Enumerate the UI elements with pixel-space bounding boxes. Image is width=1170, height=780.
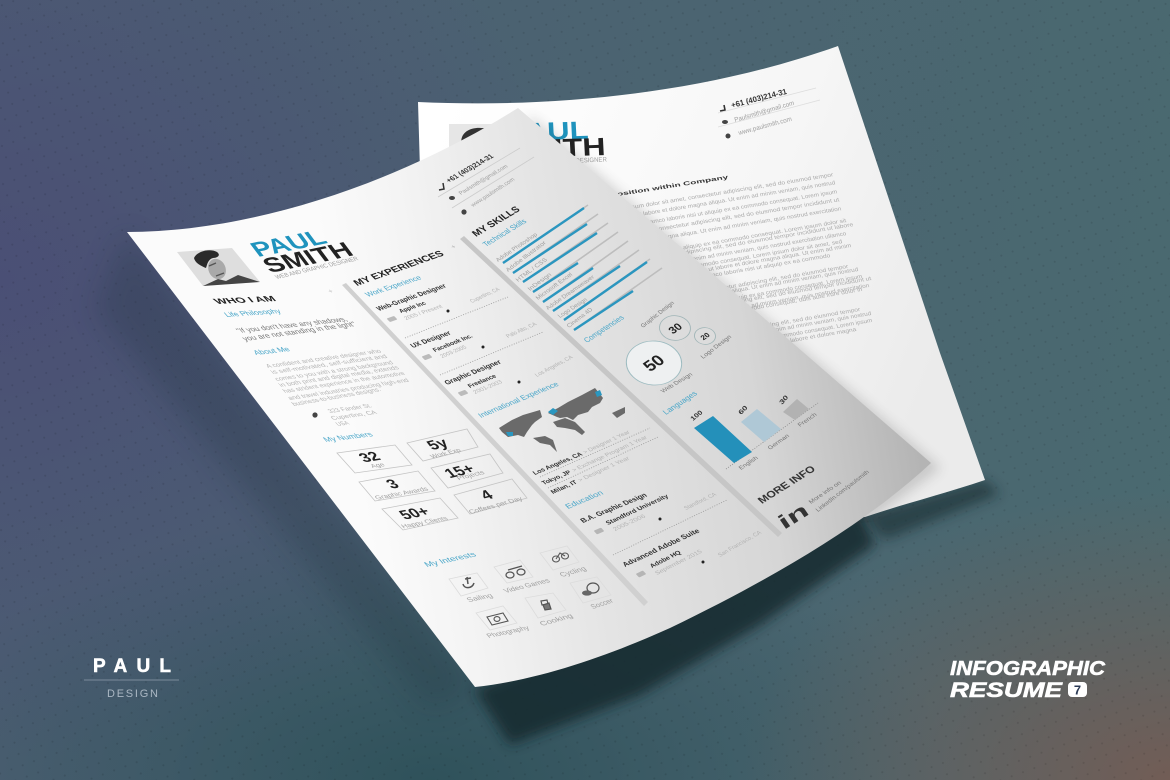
interest labels: Cycling (557, 565, 588, 579)
letterhead name: PAUL (506, 117, 589, 147)
stat values: 4 (477, 488, 497, 503)
column dividers (342, 236, 782, 606)
column 2: international experience (476, 380, 658, 495)
course entry: September 2015 (654, 549, 705, 576)
world map (499, 388, 625, 452)
degree entry (578, 491, 727, 555)
letterhead contact details (718, 87, 820, 138)
icon: location (312, 412, 318, 418)
column 3: competencies bubble chart: Logo Design (700, 335, 733, 360)
letterhead name: WEB AND GRAPHIC DESIGNER (517, 156, 607, 167)
course entry: San Francisco, CA (717, 530, 763, 558)
column 3: competencies bubble chart: Graphic Design (640, 301, 676, 329)
skill labels: HTML / CSS (515, 257, 549, 283)
header: name: WEB AND GRAPHIC DESIGNER (274, 256, 360, 281)
column 2: my experiences (351, 244, 575, 396)
job: graphic designer: Graphic Designer (442, 358, 503, 386)
column 2: international experience: International Experience (476, 380, 561, 419)
job: graphic designer: Freelance (467, 373, 499, 389)
column 1: my numbers: My Numbers (321, 430, 375, 444)
letter body: amet, consectetur adipiscing elit, sed do eiusmod tempor incididunt ut labore (626, 222, 854, 266)
column 2: my experiences: Work Experience (363, 274, 424, 298)
skill labels: Adobe Illustrator (505, 240, 548, 273)
header: name: SMITH (257, 238, 359, 278)
bubble: web design 50: 50 (639, 351, 669, 375)
bubble: graphic design 30 (653, 311, 697, 345)
column 1: my interests: My Interests (422, 550, 478, 569)
marker: plus: + (327, 289, 335, 295)
letter body: labore et dolore magna aliqua. Ut enim ad minim veniam, quis nostrud exercitation (614, 206, 842, 249)
address: Cupertino, CA (330, 410, 379, 422)
letter body: incididunt ut labore et dolore magna aliqua. Ut enim ad minim veniam, quis nostrud (608, 180, 836, 223)
column 3: my skills: Technical Skills (481, 217, 528, 248)
column 3: more info (756, 464, 871, 534)
job: web-graphic designer: Cupertino, CA (469, 287, 501, 304)
column 3: competencies bubble chart: Competencies (582, 313, 626, 344)
icon: linkedin: in (774, 499, 813, 534)
about me paragraph: in both print and digital media, extends (278, 365, 401, 389)
places list: > Designer 1 Year (577, 456, 631, 483)
letter body: ullamco laboris nisi ut aliquip ex ea commodo consequat. Lorem ipsum dolor sit (619, 218, 848, 262)
bubble: logo design 20 (690, 324, 720, 348)
stat values (356, 436, 497, 523)
stat values: 15+ (441, 462, 479, 481)
letterhead photo (449, 124, 519, 184)
skill labels: Adobe Dreamweaver (545, 275, 596, 311)
skill labels: Logo Design (557, 297, 589, 319)
column 3: competencies bubble chart (582, 301, 733, 394)
badge: 7: 7 (1074, 682, 1081, 698)
stat labels (369, 448, 525, 530)
skill bar values (503, 208, 647, 330)
places list (532, 428, 658, 495)
column 3: contact details: www.paulsmith.com (469, 177, 517, 209)
job: ux designer: Palo Alto, CA (505, 322, 539, 339)
column 1: my interests (422, 546, 616, 640)
skill bar tracks (503, 205, 662, 330)
bar: german (741, 409, 781, 442)
interest labels: Soccer (588, 597, 616, 610)
bar values: 60 (737, 404, 750, 416)
stat labels: Coffees per Day (468, 496, 525, 516)
letterhead contact details: Paulsmith@gmail.com (734, 100, 795, 124)
letter body: Lorem ipsum dolor sit amet, consectetur adipiscing elit, sed do eiusmod tempor (606, 172, 834, 215)
course entry: Adobe HQ (649, 550, 683, 569)
bar labels (738, 412, 819, 471)
column 3: my skills (470, 205, 662, 330)
stat values: 32 (356, 450, 385, 465)
column 3: contact details (438, 148, 534, 215)
skill labels: InDesign (527, 272, 553, 292)
degree entry: Standford, CA (683, 492, 718, 511)
column 3: more info: More info on (808, 481, 843, 505)
logo: paul design: DESIGN (107, 688, 158, 700)
column 3: languages bar chart: Languages (661, 389, 699, 416)
job: web-graphic designer: Apple Inc (398, 300, 428, 314)
stat labels: Age (369, 462, 387, 470)
job: ux designer (408, 322, 543, 375)
job: graphic designer (442, 355, 575, 396)
bar: english (694, 416, 752, 463)
letterhead name: SMITH (505, 133, 606, 164)
header: photo (177, 248, 260, 286)
interest labels: Video Games (501, 577, 552, 595)
column 1: who i am: About Me (251, 345, 292, 357)
logo: paul design: PAUL (93, 656, 171, 677)
icon: cycling (552, 553, 568, 562)
bar values: 100 (689, 409, 705, 422)
letter body: incididunt ut labore et dolore magna aliqua. Ut enim ad minim veniam, quis nostrud (631, 267, 859, 312)
letter body: Lorem ipsum dolor sit amet, consectetur adipiscing elit, sed do eiusmod tempor (633, 307, 861, 352)
job: web-graphic designer (374, 282, 508, 338)
column 3: more info: LinkedIn.com/paulsmith (815, 470, 871, 513)
letter body: dolor sit amet, consectetur adipiscing elit, sed do eiusmod tempor incididunt ut (612, 197, 841, 240)
icon: cooking (541, 600, 551, 610)
bar labels: French (797, 412, 819, 428)
places list: Milan, IT (550, 480, 579, 495)
interest labels (464, 565, 616, 640)
column 3: more info: MORE INFO (756, 464, 818, 506)
job: ux designer: Facebook Inc. (432, 333, 475, 353)
stat values: 3 (383, 477, 403, 492)
address (327, 403, 379, 428)
shadow of front sheet on back sheet (530, 116, 940, 517)
badge: 7 (1068, 682, 1087, 698)
skill labels (495, 232, 596, 329)
stat boxes (337, 429, 527, 530)
cast shadows (95, 232, 1000, 745)
skill labels: Cinema 4D (566, 307, 595, 329)
about me paragraph: comes to you with a strong background (274, 360, 395, 383)
places list: Los Angeles, CA (532, 451, 585, 476)
skill labels: Adobe Photoshop (495, 232, 540, 263)
letter body: Lorem ipsum dolor sit amet, consectetur adipiscing elit, sed do eiusmod tempor (621, 264, 849, 309)
column 3: contact details: +61 (403)214-31 (444, 152, 495, 184)
letter body: dolor sit amet, consectetur adipiscing elit, sed do eiusmod tempor incididunt ut (644, 276, 873, 321)
letter body: laboris nisi ut aliquip ex ea commodo consequat. Lorem ipsum dolor sit amet, sed (615, 239, 843, 283)
bar: french (783, 399, 809, 420)
letterhead contact details: +61 (403)214-31 (730, 87, 788, 110)
job: web-graphic designer: 2005 / Present (403, 304, 445, 321)
stat values: 50+ (396, 505, 434, 523)
degree entry: 2005-2006 (612, 514, 648, 532)
column 3: languages bar chart (661, 389, 819, 471)
stat labels: Graphic Awards (374, 486, 431, 501)
column 1: who i am (212, 295, 411, 428)
stat labels: Happy Clients (400, 516, 450, 530)
column 3: competencies bubble chart: Web Design (660, 372, 694, 394)
job: web-graphic designer: Web-Graphic Designer (374, 282, 448, 312)
column 1: who i am: you are not standing in the light" (240, 320, 358, 343)
letter body: exercitation ullamco laboris nisi ut aliquip ex ea commodo consequat. Lorem ipsum (645, 318, 873, 363)
job: ux designer: UX Designer (408, 329, 453, 349)
bubble: logo design 20: 20 (698, 331, 712, 342)
about me paragraph: is self-motivated, self-sufficient and (270, 354, 389, 376)
stat labels: Projects (456, 470, 487, 482)
letter body: exercitation ullamco laboris nisi ut aliquip ex ea commodo consequat. Lorem ipsum (610, 189, 838, 232)
places list: Tokyo, JP (541, 469, 574, 486)
column 1: my numbers (321, 429, 527, 530)
column 3: my skills: MY SKILLS (470, 205, 523, 239)
bar labels: English (738, 456, 760, 471)
bar values: 30 (778, 394, 790, 406)
letter body: labore et dolore magna aliqua. Ut enim ad minim veniam, quis nostrud exercitation (642, 283, 870, 328)
places list: > Designer 1 Year (582, 430, 632, 455)
letter body: do eiusmod tempor incididunt ut labore et dolore magna aliqua. Ut enim ad minim (624, 243, 852, 287)
letter body (632, 173, 872, 342)
course entry: Advanced Adobe Suite (620, 527, 702, 568)
column 2: education: Education (563, 489, 605, 510)
degree entry: B.A. Graphic Design (578, 491, 649, 524)
places list: > Exchange Program 1 Year (571, 435, 649, 473)
job: graphic designer: 2001-2003 (472, 380, 505, 395)
column 2: education (563, 489, 763, 578)
letter body: exercitation ullamco laboris nisi ut aliquip ex ea commodo consequat. Lorem ipsum (635, 274, 863, 319)
letter body: et dolore magna aliqua. Ut enim ad minim veniam, quis nostrud exercitation ullamco (619, 231, 847, 275)
skill labels: Microsoft Excel (535, 272, 574, 301)
letter body: incididunt ut labore et dolore magna aliqua. Ut enim ad minim veniam, quis nostrud (644, 311, 872, 356)
letterhead name (505, 117, 607, 167)
about me paragraph (265, 349, 411, 408)
degree entry: Standford University (605, 493, 671, 526)
icon: soccer (582, 583, 599, 596)
column 2: my experiences: MY EXPERIENCES (351, 249, 447, 288)
header: name (245, 226, 360, 281)
course entry (620, 527, 763, 578)
column 3: contact details: Paulsmith@gmail.com (458, 164, 510, 196)
letterhead contact details: www.paulsmith.com (737, 116, 793, 137)
about me paragraph: business-to-business designs. (291, 387, 383, 408)
panel: back sheet cover letter (418, 46, 985, 565)
interest tiles (449, 546, 611, 630)
header: name: PAUL (245, 226, 332, 262)
panel: front sheet resume (127, 108, 931, 687)
column 1: who i am: Life Philosophy (222, 307, 284, 319)
column 1: who i am: "If you don't have any shadows, (234, 315, 350, 335)
bubble: graphic design 30: 30 (666, 321, 685, 336)
bar values (689, 394, 790, 422)
interest labels: Photography (484, 624, 532, 640)
letter subject: Job Ref: Advertised Position within Company (515, 175, 730, 214)
bubble: web design 50 (615, 332, 693, 394)
stat values: 5y (424, 436, 452, 453)
column 1: who i am: WHO I AM (212, 295, 279, 306)
interest labels: Sailing (464, 592, 495, 604)
letter body: dolor sit amet, commodo consequat tempor incididunt ut labore et dolore magna (629, 327, 858, 372)
icon: sailing (463, 577, 474, 588)
logo: infographic resume 7: INFOGRAPHIC (950, 657, 1106, 680)
interest labels: Cooking (537, 612, 575, 628)
logo: paul design (84, 656, 179, 700)
address: USA (335, 421, 351, 428)
about me paragraph: and travel industries producing high-end (287, 378, 411, 402)
icon: video games (506, 566, 525, 578)
address: 323 Fander St. (327, 403, 374, 415)
letter body: ullamco laboris nisi ut aliquip ex ea commodo consequat, duis aute irure dolor in (635, 287, 863, 332)
letter body: veniam, quis nostrud exercitation ullamco laboris nisi ut aliquip ex ea commodo (603, 253, 831, 297)
about me paragraph: has strident experience in the automotive (282, 371, 407, 395)
logo: infographic resume 7: RESUME (950, 678, 1063, 702)
icon: photography (487, 613, 508, 625)
column 2: my experiences: + (450, 244, 458, 250)
job: graphic designer: Los Angeles, CA (534, 355, 575, 378)
logo: infographic resume 7 (950, 657, 1106, 702)
job: ux designer: 2003-2005 (439, 345, 469, 359)
stat labels: Work Exp (429, 448, 463, 460)
about me paragraph: A confident and creative designer who (265, 349, 383, 370)
bar labels: German (767, 434, 791, 451)
